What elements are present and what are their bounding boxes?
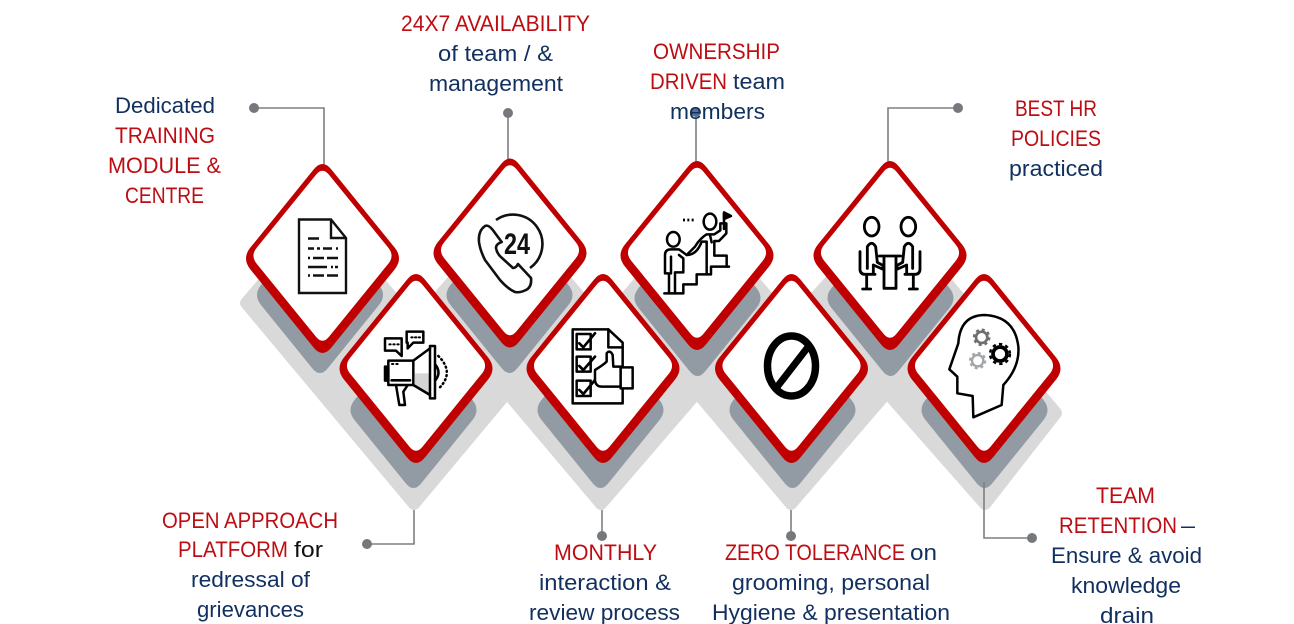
connector: zero tolerance xyxy=(786,510,796,541)
text: ownership: team xyxy=(733,69,785,94)
text: training: CENTRE xyxy=(125,183,204,208)
text: zero tolerance: ZERO TOLERANCE xyxy=(725,540,905,565)
text: HR policies: practiced xyxy=(1009,156,1103,181)
text: availability: 24X7 AVAILABILITY xyxy=(401,11,590,36)
diamond: ownership xyxy=(620,161,774,350)
connector: training xyxy=(249,103,324,166)
connector: monthly xyxy=(597,510,607,541)
text: open approach: redressal of xyxy=(191,567,311,592)
text: ownership: members xyxy=(670,99,765,124)
icon: phone 24 xyxy=(479,215,542,292)
light grey zigzag band xyxy=(246,215,1056,504)
text: team retention: Ensure & avoid xyxy=(1051,543,1202,568)
icon: head with gears xyxy=(949,315,1018,417)
text: training: Dedicated xyxy=(115,93,215,118)
diamond: training xyxy=(246,164,399,353)
connector: HR policies xyxy=(888,103,963,163)
text: open approach: for xyxy=(294,537,324,562)
text: ownership: DRIVEN xyxy=(650,69,727,94)
text: monthly: MONTHLY xyxy=(554,540,657,565)
icon: two people at table xyxy=(860,217,920,289)
text: training: MODULE & xyxy=(108,153,221,178)
text: team retention: – xyxy=(1181,513,1196,538)
diamond: team retention xyxy=(908,274,1060,463)
dark grey diamond shadows xyxy=(257,217,1048,488)
text: HR policies xyxy=(1009,96,1103,181)
text: HR policies: POLICIES xyxy=(1011,126,1101,151)
text: team retention: TEAM xyxy=(1096,483,1155,508)
text: team retention xyxy=(1051,483,1202,624)
text: availability: of team / & xyxy=(438,41,553,66)
icon: megaphone xyxy=(385,332,447,405)
text: zero tolerance: on xyxy=(910,540,937,565)
text: open approach: PLATFORM xyxy=(178,537,288,562)
icon: team climbing steps xyxy=(664,212,731,293)
text: zero tolerance xyxy=(712,540,950,624)
text: open approach xyxy=(162,508,338,622)
connector: ownership xyxy=(691,107,701,163)
text: monthly xyxy=(529,540,680,624)
text: monthly: interaction & xyxy=(539,570,671,595)
diamond: HR policies xyxy=(814,161,966,350)
icon: prohibition sign xyxy=(768,336,816,396)
text: ownership: OWNERSHIP xyxy=(653,39,780,64)
text: open approach: grievances xyxy=(197,597,304,622)
diamond: zero tolerance xyxy=(715,274,868,463)
connector: open approach xyxy=(362,510,414,549)
diamond: open approach xyxy=(340,274,492,463)
text: zero tolerance: grooming, personal xyxy=(732,570,930,595)
icon: document xyxy=(299,220,346,293)
text: team retention: knowledge xyxy=(1071,573,1181,598)
connector: availability xyxy=(503,108,513,160)
text: training: TRAINING xyxy=(115,123,215,148)
text: availability xyxy=(401,11,590,96)
text: HR policies: BEST HR xyxy=(1015,96,1097,121)
diamond: availability xyxy=(434,158,586,348)
connector: team retention xyxy=(984,482,1037,543)
text: training xyxy=(108,93,221,208)
text: open approach: OPEN APPROACH xyxy=(162,508,338,533)
diamond: monthly xyxy=(526,274,680,463)
text: team retention: RETENTION xyxy=(1059,513,1177,538)
text: availability: management xyxy=(429,71,564,96)
icon: checklist with thumbs up xyxy=(573,329,633,403)
text: ownership xyxy=(650,39,785,124)
icon: phone 24: 24 xyxy=(504,228,530,261)
